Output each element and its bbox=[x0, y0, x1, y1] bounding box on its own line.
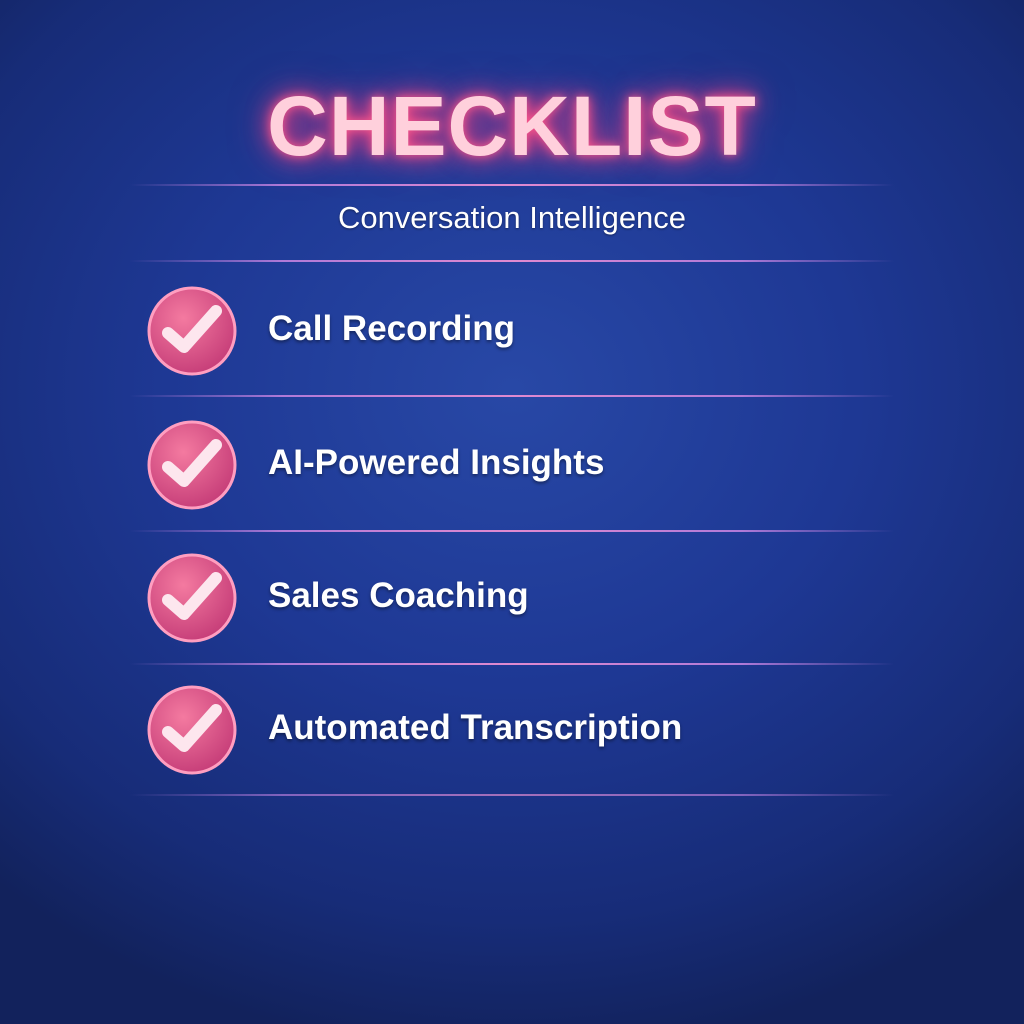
title: CHECKLIST bbox=[267, 79, 757, 173]
item: transcription: Automated Transcription bbox=[268, 708, 682, 747]
item: call recording bbox=[148, 286, 515, 376]
item: call recording: Call Recording bbox=[268, 309, 515, 348]
subtitle: Conversation Intelligence bbox=[338, 200, 686, 235]
item: sales coaching: Sales Coaching bbox=[268, 576, 529, 615]
item: ai insights bbox=[148, 420, 604, 510]
icon: check bbox=[148, 420, 236, 510]
item: transcription bbox=[148, 686, 682, 774]
item: ai insights: AI-Powered Insights bbox=[268, 443, 604, 482]
item: sales coaching bbox=[148, 554, 529, 642]
icon: check bbox=[148, 554, 236, 642]
icon: check bbox=[148, 286, 236, 376]
icon: check bbox=[148, 686, 236, 774]
